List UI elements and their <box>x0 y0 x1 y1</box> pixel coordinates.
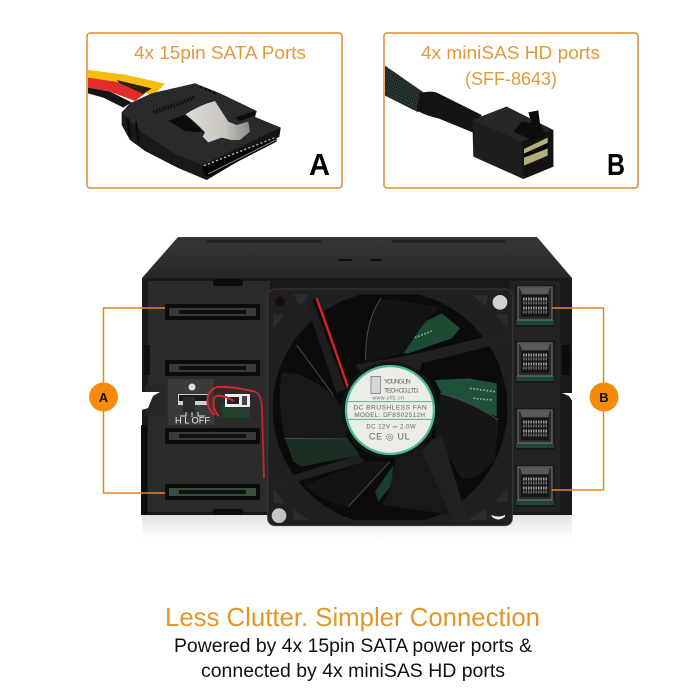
fan label sticker: DC 12V ⎓ 2.0W <box>366 425 416 431</box>
fan speed switch <box>168 379 214 426</box>
card A letter: A <box>309 147 330 182</box>
cooling fan <box>268 289 512 526</box>
fan label sticker: CE ◎ UL <box>369 431 410 441</box>
miniSAS HD port sockets <box>515 285 555 507</box>
fan speed switch: H L OFF <box>175 416 210 426</box>
callout: A bracket: A <box>99 390 109 405</box>
red and black fan wires <box>315 299 348 387</box>
card B letter: B <box>607 147 625 182</box>
fan power connector and wires <box>207 387 264 478</box>
badge A <box>89 382 118 412</box>
corner gussets <box>273 294 508 520</box>
panel: miniSAS HD card B <box>384 33 638 188</box>
fan label sticker: DC BRUSHLESS FAN <box>353 405 427 412</box>
description line 2: connected by 4x miniSAS HD ports <box>201 661 505 682</box>
device reflection <box>142 515 572 539</box>
enclosure front face <box>142 278 572 515</box>
fan frame <box>268 289 512 526</box>
callout: B bracket: B <box>599 390 609 405</box>
icon: miniSAS HD cable <box>385 66 553 179</box>
panel: SATA ports card A <box>87 33 342 188</box>
fan label sticker: YOUNG LIN <box>384 379 411 386</box>
card A heading: 4x 15pin SATA Ports <box>134 43 306 63</box>
icon: SATA power connector <box>88 70 281 180</box>
card B heading: 4x miniSAS HD ports <box>421 43 600 63</box>
callout: A bracket <box>89 308 165 493</box>
circuit board seen through the fan <box>403 313 460 353</box>
card B subheading: (SFF-8643) <box>465 69 557 89</box>
fan label sticker: www.ylfz.cn <box>372 396 404 402</box>
fan label sticker <box>346 366 434 454</box>
SATA port slots <box>165 304 260 500</box>
callout: B bracket <box>552 308 618 490</box>
badge B <box>590 382 618 412</box>
fan blades <box>365 298 440 363</box>
enclosure top face <box>142 237 572 278</box>
fan hub <box>342 362 438 458</box>
fan struts <box>355 331 508 375</box>
fan label sticker: MODEL: DF8S02512H <box>354 412 425 419</box>
infographic canvas <box>86 32 639 681</box>
description line 1: Powered by 4x 15pin SATA power ports & <box>174 636 532 657</box>
device: drive enclosure <box>141 237 573 526</box>
title: Less Clutter. Simpler Connection <box>165 602 540 632</box>
fan label sticker: TECH CO.,LTD. <box>384 387 419 394</box>
mounting screws <box>272 508 286 523</box>
